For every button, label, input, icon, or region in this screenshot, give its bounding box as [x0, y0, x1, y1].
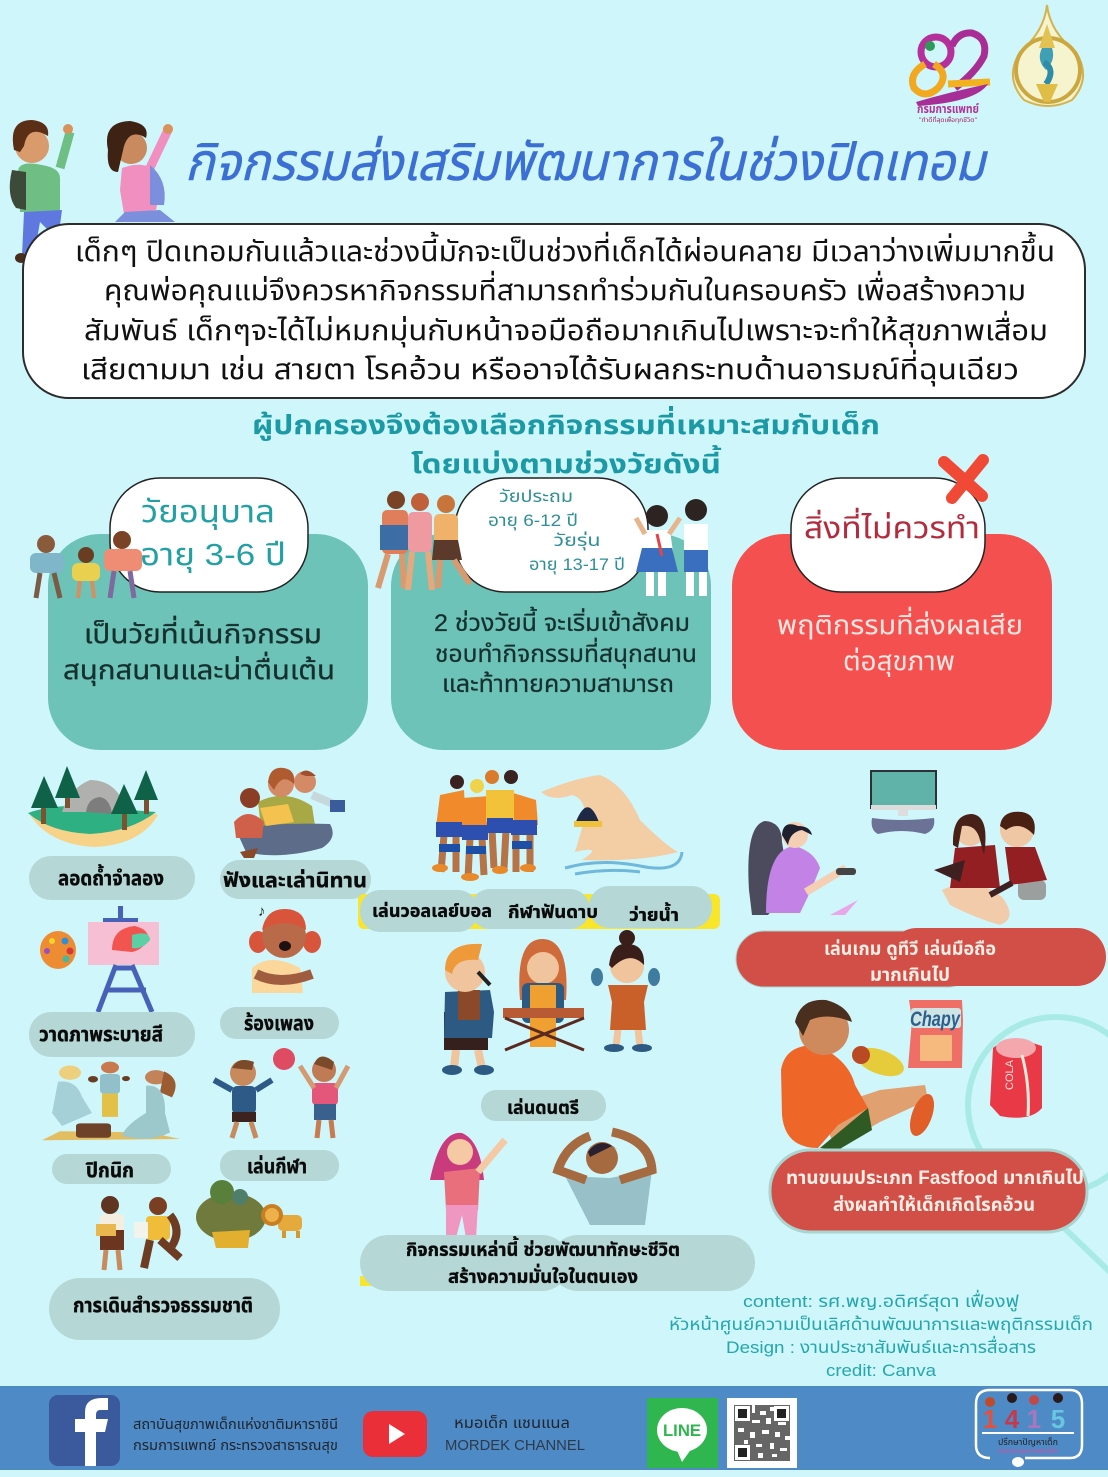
activity label: picnic: ปิกนิก: [86, 1160, 134, 1182]
icon: pink girl: [430, 1133, 505, 1238]
activity label: cave: [29, 856, 195, 900]
logo: 82 anniversary: [912, 33, 990, 124]
icon: boy eating: [781, 1000, 939, 1150]
activity label: screen time: มากเกินไป: [870, 965, 950, 986]
avoid: screen time: [736, 771, 1106, 987]
icon: father reading to children: [234, 768, 345, 858]
activity label: fast food: ส่งผลทำให้เด็กเกิดโรคอ้วน: [833, 1193, 1035, 1216]
credits text: content: รศ.พญ.อดิศร์สุดา เฟื่องฟู: [743, 1289, 1019, 1313]
panel: primary and teen age: ชอบทำกิจกรรมที่สนุกสนาน: [435, 637, 697, 669]
activity label: painting: วาดภาพระบายสี: [39, 1024, 163, 1046]
panel: primary and teen age: อายุ 13-17 ปี: [529, 555, 625, 575]
panel: kindergarten age: เป็นวัยที่เน้นกิจกรรม: [84, 615, 322, 649]
icon: LINE: [647, 1398, 718, 1468]
panel: intro text box: [23, 224, 1085, 398]
logo: department emblem: [1013, 5, 1083, 106]
icon: QR code: [727, 1398, 797, 1468]
icon: children playing with controllers: [934, 812, 1047, 925]
subheading: [252, 406, 880, 479]
icon: swimmer: [541, 775, 682, 874]
title: กิจกรรมส่งเสริมพัฒนาการในช่วงปิดเทอม: [185, 134, 988, 192]
panel: primary and teen age: 2 ช่วงวัยนี้ จะเริ่มเข้าสังคม: [434, 606, 690, 637]
logo: 1415 hotline: 1: [983, 1404, 997, 1434]
icon: chips bag: [908, 1000, 963, 1068]
credits text: [669, 1289, 1093, 1380]
panel: kindergarten age: วัยอนุบาล: [141, 494, 275, 530]
logo: 1415 hotline: [976, 1390, 1082, 1467]
logo: 1415 hotline: ปรึกษาปัญหาเด็ก: [998, 1437, 1058, 1447]
avoid: junk food: [770, 1000, 1087, 1232]
footer text: institute: กรมการแพทย์ กระทรวงสาธารณสุข: [133, 1437, 338, 1454]
icon: children with ball: [214, 1048, 348, 1138]
panel: primary and teen age: อายุ 6-12 ปี: [488, 511, 578, 531]
logo: 1415 hotline: 4: [1005, 1404, 1020, 1434]
footer text: channel: MORDEK CHANNEL: [445, 1437, 585, 1454]
activity label: life skills: สร้างความมั่นใจในตนเอง: [448, 1264, 638, 1288]
icon: volleyball team: [432, 770, 538, 881]
panel: intro text box: เสียตามมา เช่น สายตา โรคอ้วน หรืออาจได้รับผลกระทบด้านอารมณ์ที่ฉุนเฉียว: [81, 349, 1019, 386]
activity label: nature walk: การเดินสำรวจธรรมชาติ: [73, 1295, 253, 1317]
subheading: ผู้ปกครองจึงต้องเลือกกิจกรรมที่เหมาะสมกับเด็ก: [252, 406, 880, 441]
icon: man combing hair: [558, 1132, 652, 1225]
activity label: fast food: ทานขนมประเภท Fastfood มากเกินไป: [786, 1168, 1084, 1189]
logo: 82 anniversary: "ทำดีที่สุดเพื่อทุกชีวิต": [919, 115, 977, 124]
activity: cave: [28, 766, 195, 900]
panel: primary and teen age: [378, 478, 711, 750]
activity label: singing: ร้องเพลง: [244, 1013, 314, 1035]
activity label: painting: [29, 1012, 195, 1057]
panel: intro text box: สัมพันธ์ เด็กๆจะได้ไม่หมกมุ่นกับหน้าจอมือถือมากเกินไปเพราะจะทำให้สุขภาพเสื่อม: [84, 310, 1048, 347]
icon: computer: [871, 771, 936, 834]
logo: 1415 hotline: 1: [1027, 1404, 1041, 1434]
activity label: screen time: [736, 928, 1106, 987]
credits text: credit: Canva: [826, 1361, 937, 1380]
activity label: music: เล่นดนตรี: [507, 1097, 579, 1119]
icon: red cross: [944, 460, 983, 498]
activity labels: volleyball, fencing, swimming: [358, 886, 720, 932]
label: swimming: ว่ายน้ำ: [629, 902, 679, 925]
footer text: channel: [445, 1414, 585, 1454]
illustration: two waving children: [10, 120, 175, 263]
logo: 1415 hotline: สายด่วนสุขภาพจิตเด็ก: [998, 1448, 1058, 1455]
panel: intro text box: คุณพ่อคุณแม่จึงควรหากิจกรรมที่สามารถทำร่วมกันในครอบครัว เพื่อสร้างความ: [104, 270, 1026, 307]
icon: gamer in hoodie: [748, 821, 858, 915]
logo: 1415 hotline: 5: [1051, 1404, 1065, 1434]
activity label: fast food: [770, 1150, 1087, 1232]
icon: three small children: [30, 531, 142, 598]
activity: painting: [29, 906, 195, 1057]
icon: boy waving: [10, 120, 73, 263]
icon: singing girl: ♪: [258, 903, 266, 920]
panel: things not to do: [732, 460, 1052, 750]
activity label: cave: ลอดถ้ำจำลอง: [58, 864, 164, 890]
panel: kindergarten age: อายุ 3-6 ปี: [140, 537, 286, 573]
activity: storytelling: [220, 768, 371, 899]
footer text: institute: สถาบันสุขภาพเด็กแห่งชาติมหาราชินี: [133, 1416, 338, 1433]
footer text: channel: หมอเด็ก แชนแนล: [454, 1414, 570, 1432]
panel: kindergarten age: [30, 478, 368, 750]
icon: chips bag: Chapy: [910, 1008, 961, 1031]
panel: things not to do: ต่อสุขภาพ: [843, 646, 955, 677]
icon: family picnic: [42, 1062, 180, 1140]
activity label: life skills: [360, 1235, 755, 1291]
footer text: institute: [133, 1416, 338, 1454]
icon: cola can: COLA: [1004, 1059, 1016, 1090]
subheading: โดยแบ่งตามช่วงวัยดังนี้: [411, 445, 722, 479]
credits text: Design : งานประชาสัมพันธ์และการสื่อสาร: [726, 1335, 1036, 1357]
panel: things not to do: สิ่งที่ไม่ควรทำ: [804, 507, 980, 545]
icon: cola can: [990, 1038, 1042, 1118]
icon: children exploring and wildlife: [96, 1180, 302, 1270]
panel: kindergarten age: สนุกสนานและน่าตื่นเต้น: [63, 651, 335, 686]
panel: primary and teen age: และท้าทายความสามารถ: [442, 671, 674, 698]
activity label: screen time: เล่นเกม ดูทีวี เล่นมือถือ: [824, 938, 996, 960]
footer band: [0, 1386, 1108, 1470]
activity: nature walk: [49, 1180, 302, 1340]
icon: facebook: [49, 1395, 120, 1466]
decorative magnifier ring: background shape: [968, 1017, 1108, 1274]
panel: intro text box: เด็กๆ ปิดเทอมกันแล้วและช่วงนี้มักจะเป็นช่วงที่เด็กได้ผ่อนคลาย มีเวลาว่างเพิ่มมากขึ้น: [75, 231, 1055, 268]
activity: picnic: [42, 1062, 180, 1184]
activity: volleyball and swimming: [358, 770, 720, 932]
activity label: storytelling: ฟังและเล่านิทาน: [223, 870, 367, 892]
panel: things not to do: พฤติกรรมที่ส่งผลเสีย: [777, 606, 1023, 640]
activity: music: [442, 930, 660, 1121]
activity: singing: [220, 903, 339, 1039]
icon: palette and easel: [40, 906, 159, 1012]
icon: youtube: [363, 1411, 427, 1457]
label: fencing: กีฬาฟันดาบ: [508, 902, 598, 922]
icon: girl waving: [107, 121, 175, 222]
label: volleyball: เล่นวอลเลย์บอล: [372, 901, 492, 921]
logo: 82 anniversary: กรมการแพทย์: [917, 102, 979, 116]
icon: cave with trees: [28, 766, 158, 847]
activity label: nature walk: [49, 1278, 280, 1340]
icon: children playing instruments: [442, 930, 660, 1075]
activity label: storytelling: [220, 860, 371, 899]
panel: primary and teen age: วัยรุ่น: [554, 531, 600, 551]
activity label: sports: เล่นกีฬา: [247, 1156, 307, 1178]
credits text: หัวหน้าศูนย์ความเป็นเลิศด้านพัฒนาการและพฤติกรรมเด็ก: [669, 1314, 1093, 1336]
activity label: music: [481, 1090, 606, 1121]
activity: life skills: [360, 1132, 755, 1291]
activity: sports: [214, 1048, 348, 1181]
panel: primary and teen age: วัยประถม: [499, 487, 573, 506]
icon: students in uniform: [636, 499, 708, 596]
icon: teenage group: [378, 491, 470, 590]
activity label: life skills: กิจกรรมเหล่านี้ ช่วยพัฒนาทักษะชีวิต: [406, 1236, 680, 1261]
icon: LINE: LINE: [663, 1421, 701, 1440]
